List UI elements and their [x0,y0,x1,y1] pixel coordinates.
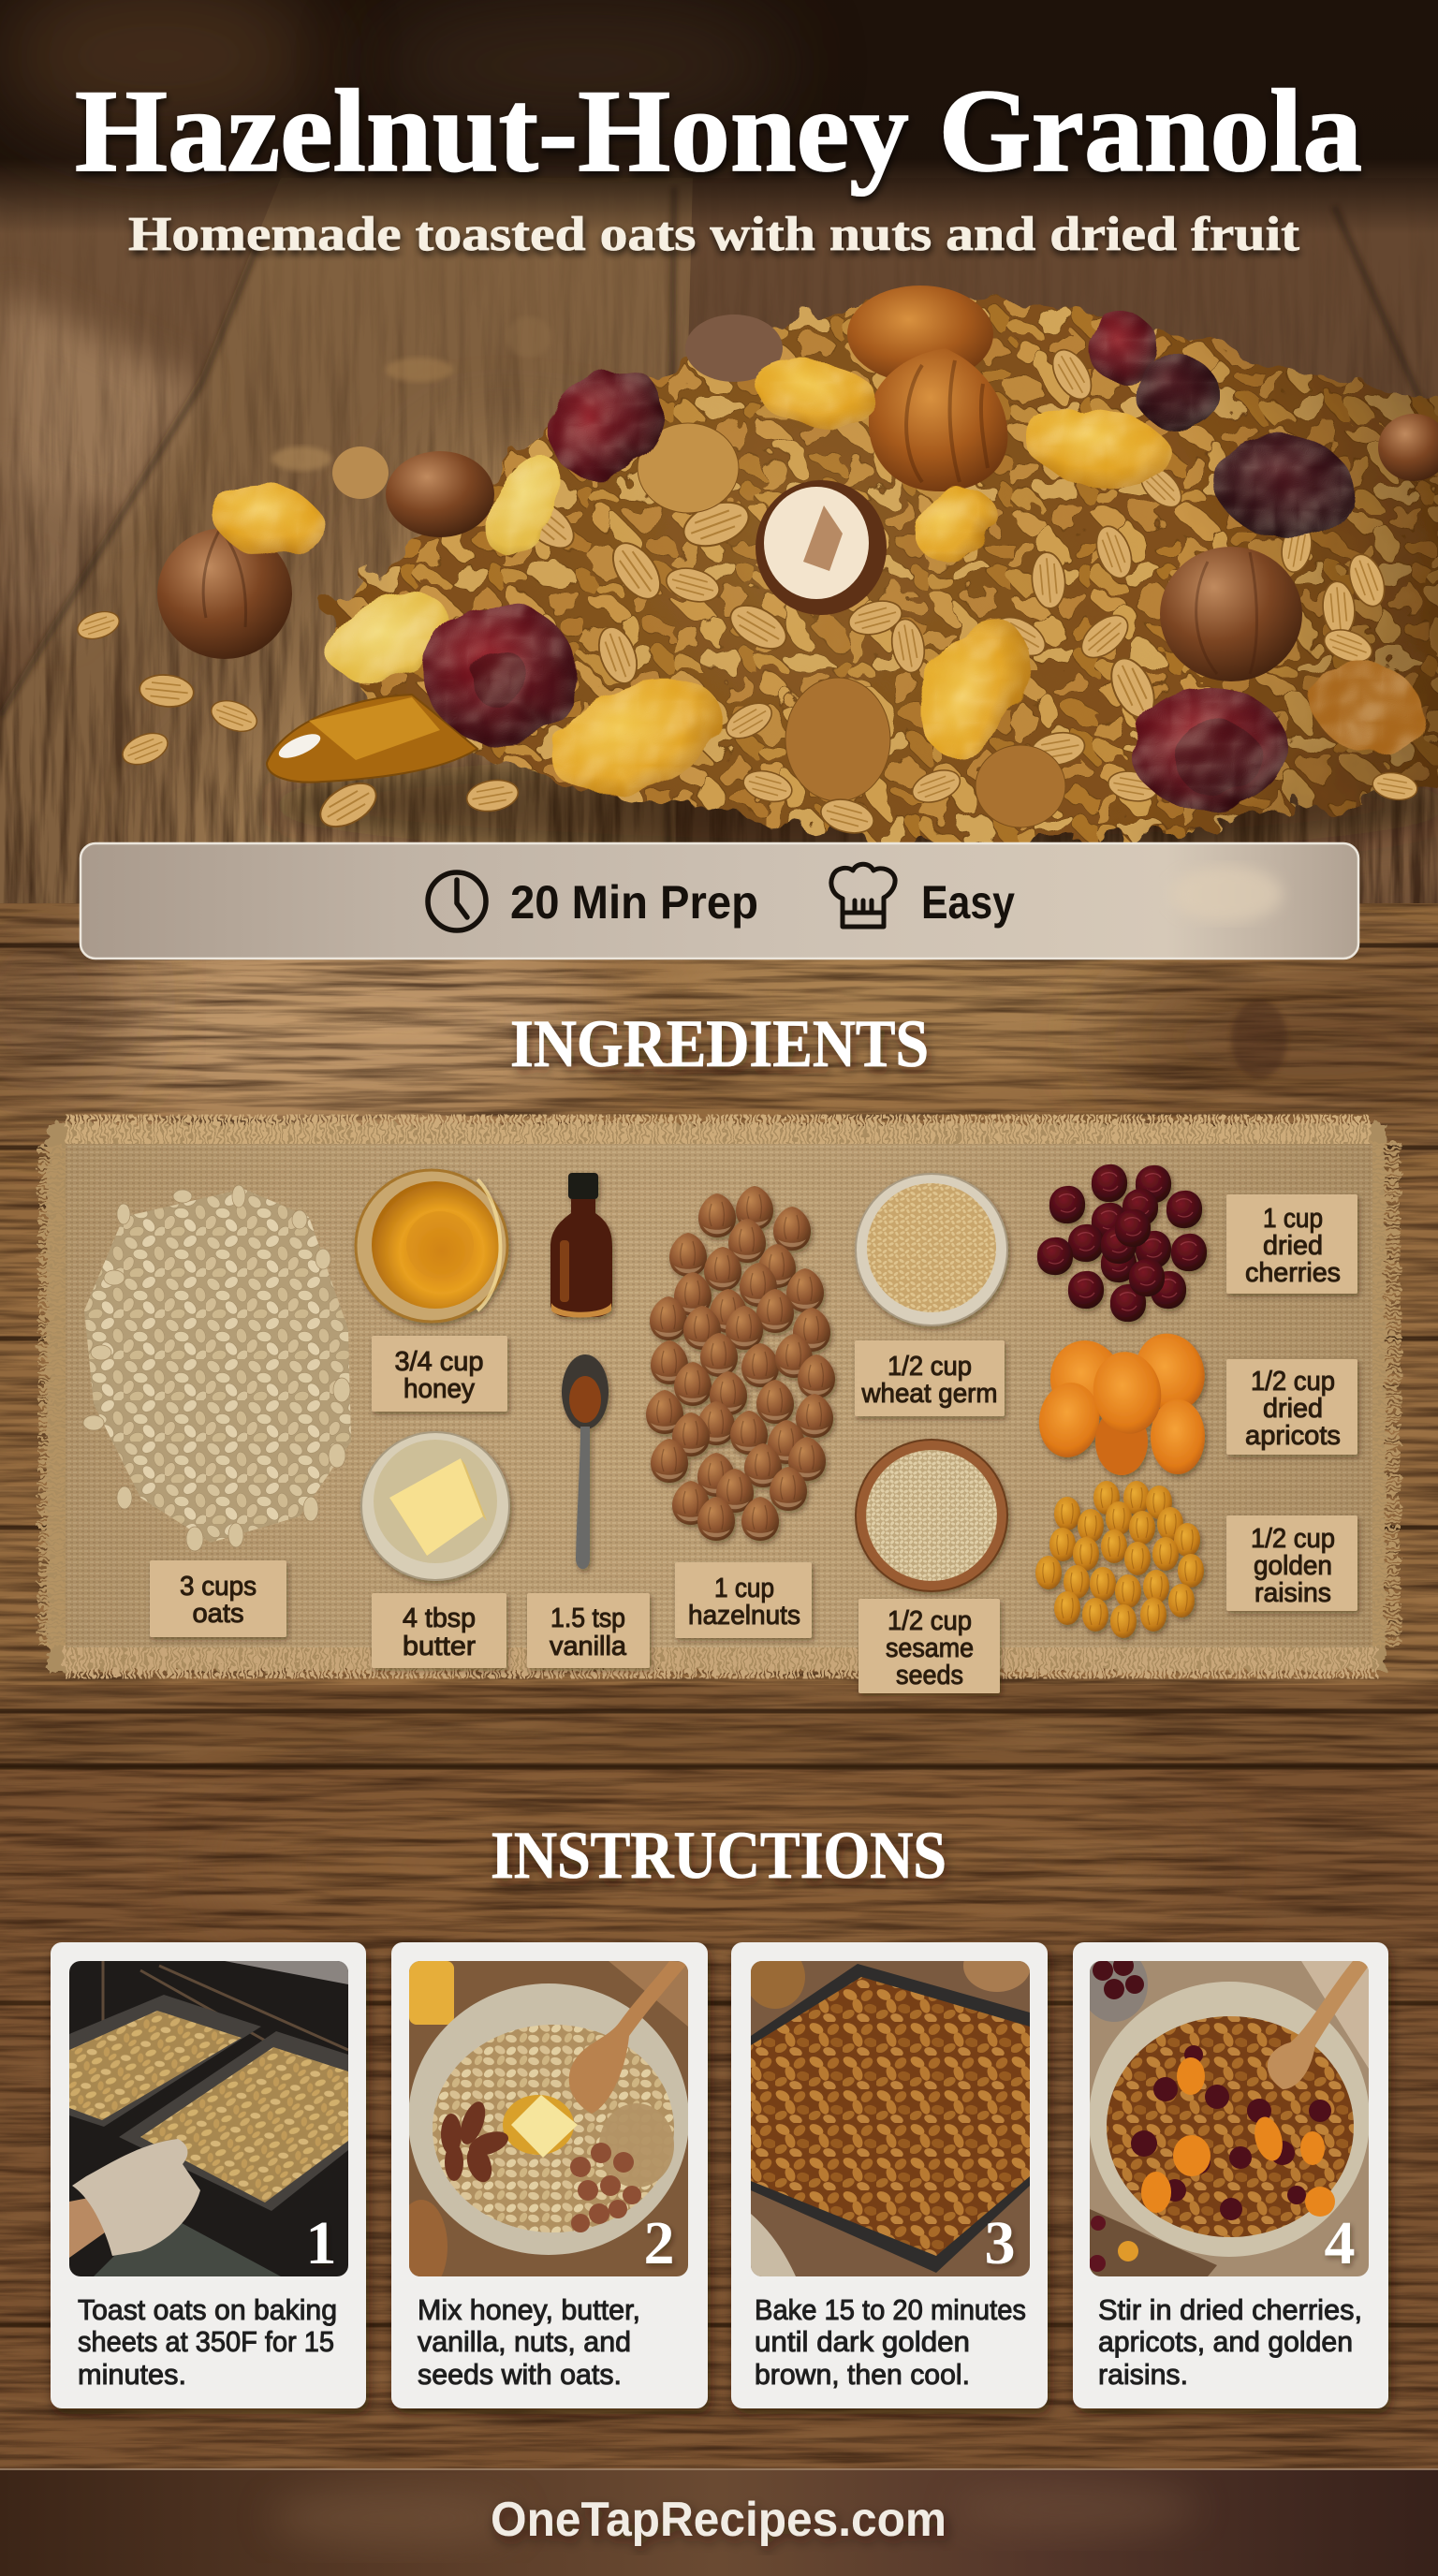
step 4 text: Stir in dried cherries, [1098,2293,1362,2326]
label: sesame seeds: seeds [896,1661,963,1690]
label: butter: butter [403,1632,476,1661]
label: sesame seeds [858,1599,1000,1693]
icon: chef hat [831,864,895,927]
wheat germ bowl [856,1174,1007,1325]
hero image: granola pile [74,285,1438,856]
label: dried cherries: cherries [1245,1258,1341,1288]
label: dried apricots [1226,1359,1357,1455]
honey bowl [356,1170,507,1322]
label: sesame seeds: 1/2 cup [888,1606,972,1636]
background: ingredients wood [0,889,1438,1778]
label: sesame seeds: sesame [886,1633,974,1663]
step 1 text [78,2293,337,2391]
label: oats: 3 cups [180,1572,257,1602]
label: hazelnuts [675,1562,812,1638]
dried apricots [1034,1324,1215,1475]
website: OneTapRecipes.com [491,2493,946,2547]
oats pile [75,1179,365,1554]
step 1 text: minutes. [78,2358,186,2391]
step 2 text [418,2293,640,2391]
step 3 text: until dark golden [755,2325,970,2358]
difficulty: Easy [921,876,1015,929]
label: wheat germ [855,1340,1005,1416]
step 1 text: Toast oats on baking [78,2293,337,2326]
footer band [0,2469,1438,2576]
label: vanilla: vanilla [550,1632,627,1661]
label: dried apricots: apricots [1245,1421,1341,1451]
title: Hazelnut-Honey Granola [75,66,1362,197]
step 2 image: mixing bowl [395,1961,689,2293]
label: hazelnuts: hazelnuts [688,1601,800,1631]
label: wheat germ: 1/2 cup [888,1352,972,1382]
step card 4 [1073,1942,1388,2408]
heading: ingredients: INGREDIENTS [510,1006,929,1081]
step 3 image: baked granola tray [745,1939,1031,2276]
label: hazelnuts: 1 cup [714,1573,774,1603]
step card 2 [391,1942,708,2408]
label: butter [372,1593,506,1668]
label: dried cherries: dried [1263,1231,1323,1261]
honey spill [267,695,477,783]
step 2 text: Mix honey, butter, [418,2293,640,2326]
background: instructions wood [0,1767,1438,2471]
step 2 text: seeds with oats. [418,2358,622,2391]
granola mass [328,295,1438,842]
pile shadow [262,754,1438,856]
step card 3 [731,1939,1048,2408]
loose flakes on table [74,316,877,839]
label: honey: honey [404,1374,475,1404]
burlap mat [47,1123,1386,1693]
vanilla bottle [550,1173,612,1318]
step 4 text: apricots, and golden [1098,2325,1353,2358]
step 1 text: sheets at 350F for 15 [78,2325,334,2358]
hazelnuts [157,285,1438,681]
label: dried apricots: 1/2 cup [1251,1367,1335,1397]
label: oats [150,1560,286,1637]
foreground flakes [513,344,1419,809]
number 3: 3 [985,2209,1015,2277]
label: honey: 3/4 cup [395,1347,483,1377]
step 4 image: finished granola bowl [1080,1947,1370,2276]
label: golden raisins: raisins [1255,1578,1331,1608]
hazelnuts [646,1186,835,1541]
golden raisins [1035,1481,1204,1638]
label: wheat germ: wheat germ [861,1379,998,1409]
prep time: 20 Min Prep [510,876,758,929]
label: golden raisins: golden [1254,1551,1332,1581]
step 3 text [755,2293,1026,2391]
info bar [81,843,1358,959]
step 4 text [1098,2293,1362,2391]
spoon [562,1354,609,1569]
golden raisins [205,356,1435,817]
label: dried cherries: 1 cup [1263,1204,1323,1234]
label: vanilla: 1.5 tsp [550,1603,625,1633]
number 2: 2 [644,2209,674,2277]
step 1 image: oven trays [69,1961,348,2276]
step 4 text: raisins. [1098,2358,1188,2391]
label: vanilla [527,1593,650,1668]
label: oats: oats [193,1599,243,1629]
step 2 text: vanilla, nuts, and [418,2325,631,2358]
hero: wooden table [0,0,1438,903]
label: honey [372,1336,507,1412]
step 3 text: brown, then cool. [755,2358,970,2391]
cherries [423,315,1365,811]
subtitle: Homemade toasted oats with nuts and dried fruit [128,208,1300,261]
step card 1 [51,1942,366,2408]
label: butter: 4 tbsp [403,1603,476,1633]
dried cherries [1037,1164,1207,1322]
label: golden raisins [1226,1515,1357,1611]
number 1: 1 [305,2209,337,2277]
number 4: 4 [1324,2209,1356,2277]
label: dried apricots: dried [1263,1394,1323,1424]
icon: clock [428,872,486,930]
step 3 text: Bake 15 to 20 minutes [755,2293,1026,2326]
label: dried cherries [1226,1194,1357,1294]
heading: instructions: INSTRUCTIONS [491,1818,946,1893]
butter bowl [361,1432,509,1580]
label: golden raisins: 1/2 cup [1251,1524,1335,1554]
sesame bowl [856,1440,1007,1591]
cluster [638,423,1065,827]
